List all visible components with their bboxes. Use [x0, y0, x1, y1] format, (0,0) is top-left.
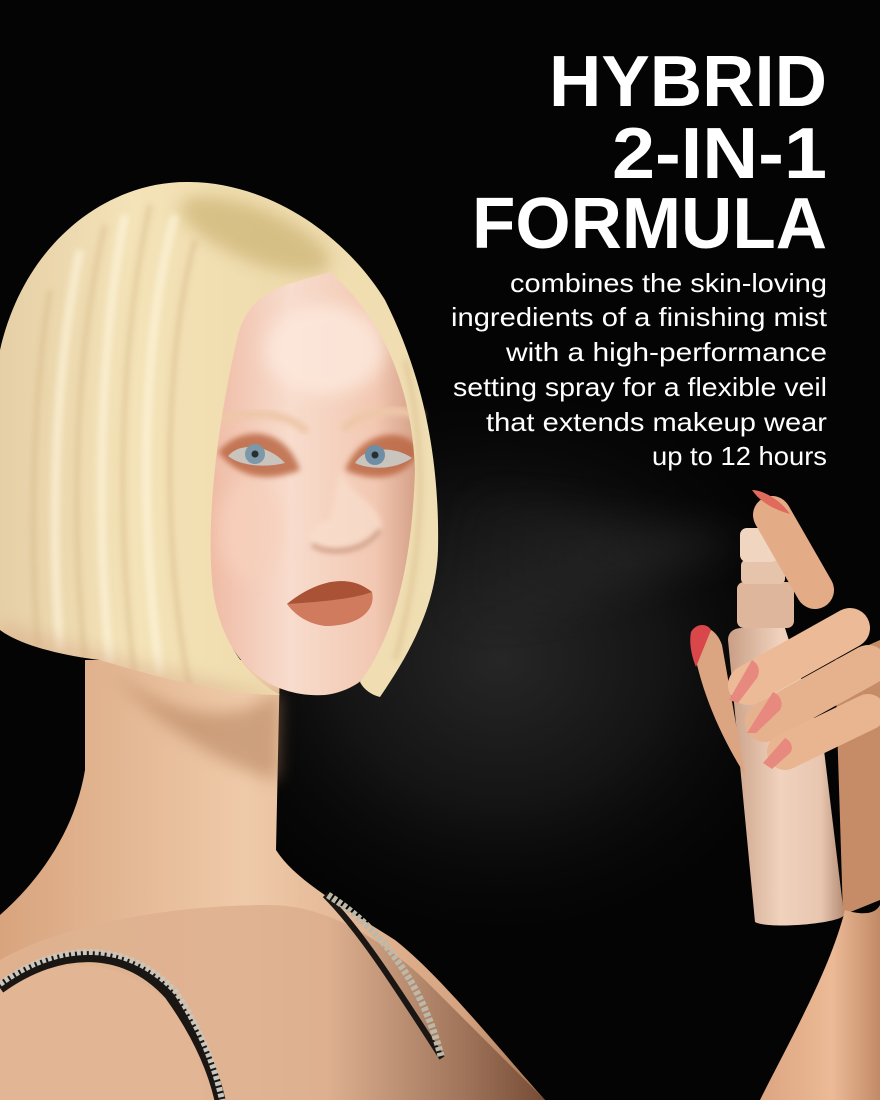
- title: FORMULA: [472, 184, 827, 264]
- title: HYBRID: [549, 42, 827, 122]
- model: neck and shoulders: [0, 660, 545, 1100]
- dress straps with crystals: [0, 957, 220, 1100]
- description text: [451, 268, 828, 471]
- lips: [287, 581, 373, 626]
- nose: [310, 470, 382, 550]
- model: face: [205, 262, 420, 695]
- description text: setting spray for a flexible veil: [453, 372, 827, 402]
- nails: [752, 490, 790, 514]
- description text: ingredients of a finishing mist: [451, 302, 828, 332]
- description text: combines the skin-loving: [510, 268, 827, 298]
- description text: up to 12 hours: [652, 441, 827, 471]
- mist plume: [430, 490, 745, 640]
- title: [472, 42, 827, 264]
- hand holding bottle: [690, 490, 880, 1100]
- eyes: [228, 447, 285, 466]
- description text: with a high-performance: [505, 337, 827, 367]
- eye makeup and brows: [218, 434, 300, 477]
- title: 2-IN-1: [612, 114, 827, 194]
- description text: that extends makeup wear: [486, 407, 827, 437]
- model: blonde bob hair: [0, 170, 445, 710]
- product: spray bottle: [728, 528, 844, 926]
